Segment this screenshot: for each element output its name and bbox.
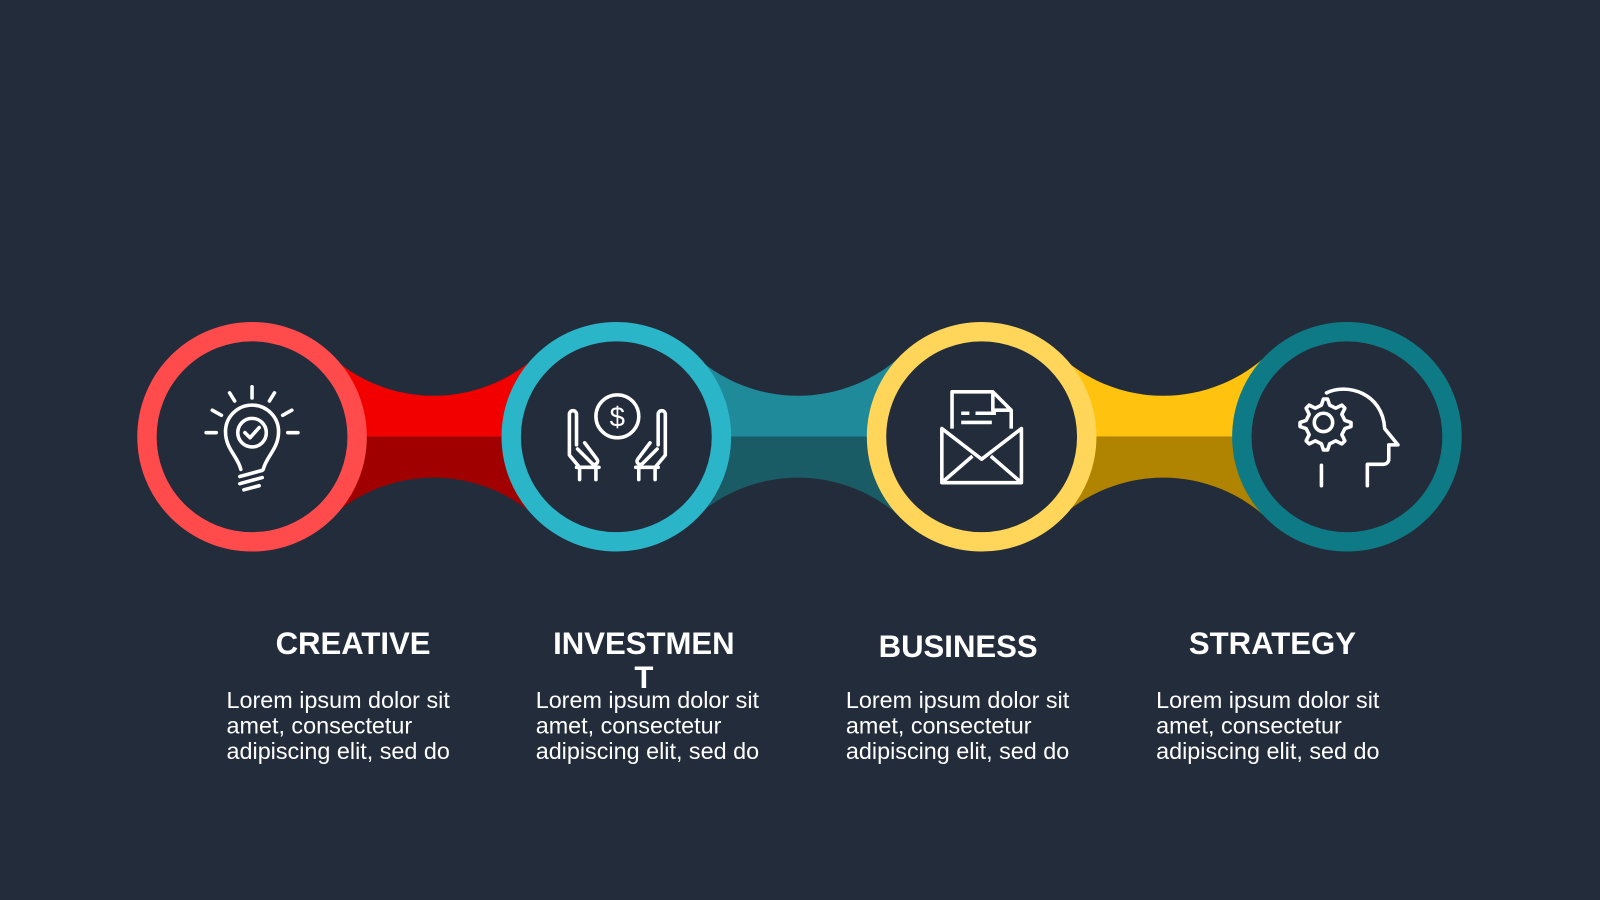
icon: hands with dollar [569,395,665,480]
text: creative body: Lorem ipsum dolor sit [227,687,450,713]
circle: creative [147,332,357,542]
title: creative: CREATIVE [276,626,431,661]
text: investment body: adipiscing elit, sed do [536,738,759,764]
text: strategy body: Lorem ipsum dolor sit [1156,687,1380,713]
text: investment body [536,687,760,764]
text: business body [846,687,1070,764]
text: creative body: adipiscing elit, sed do [227,738,450,764]
text: creative body [227,687,450,764]
text: creative body: amet, consectetur [227,713,412,739]
text: business body: adipiscing elit, sed do [846,738,1069,764]
circle: business [877,332,1087,542]
title: business: BUSINESS [879,629,1038,664]
text: business body: Lorem ipsum dolor sit [846,687,1070,713]
circle: investment [511,332,721,542]
text: investment body: Lorem ipsum dolor sit [536,687,760,713]
title: investment: T [634,660,653,695]
icon: envelope with document [942,392,1021,483]
title: investment [553,626,735,695]
text: strategy body [1156,687,1380,764]
icon: hands with dollar: $ [610,402,625,433]
title: strategy: STRATEGY [1189,626,1356,661]
icon: lightbulb [206,387,298,490]
connector: yellow [1036,347,1291,527]
text: strategy body: amet, consectetur [1156,713,1342,739]
text: business body: amet, consectetur [846,713,1032,739]
connector: red [306,347,561,527]
title: investment: INVESTMEN [553,626,735,661]
circle: strategy [1242,332,1452,542]
text: strategy body: adipiscing elit, sed do [1156,738,1379,764]
icon: head with gear [1300,389,1398,486]
text: investment body: amet, consectetur [536,713,722,739]
connector: teal [670,347,926,527]
